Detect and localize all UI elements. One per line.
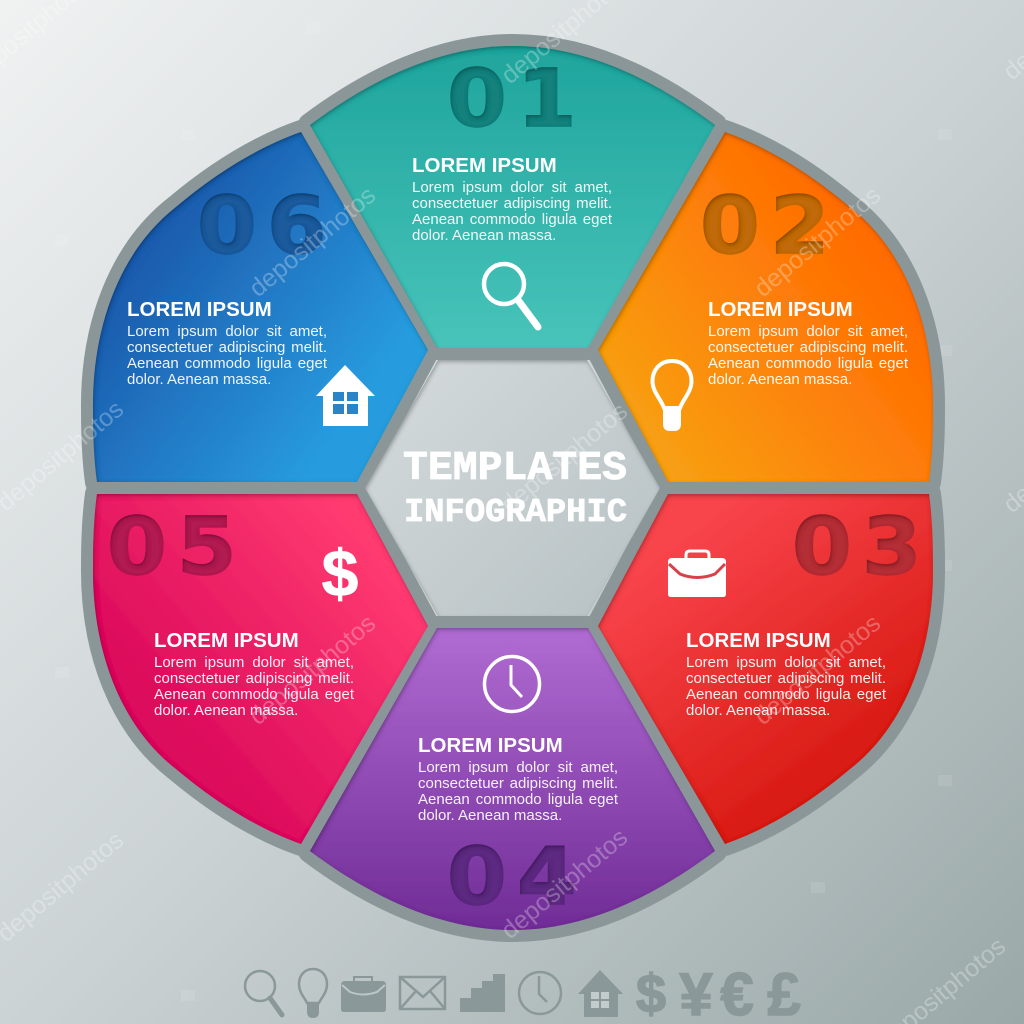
- number 03: 03: [792, 501, 932, 593]
- heading 02: LOREM IPSUM: [708, 298, 853, 321]
- panel 02: orange: [598, 132, 933, 482]
- panel 01: teal: [310, 46, 715, 348]
- number 06: 06: [197, 180, 337, 272]
- watermarks: depositphotos: [496, 823, 633, 945]
- heading 01: LOREM IPSUM: [412, 154, 557, 177]
- icon: dollar: $: [322, 536, 358, 610]
- watermarks: depositphotos: [496, 397, 633, 519]
- icon: light bulb: [652, 361, 692, 431]
- title: [403, 446, 627, 532]
- watermarks: depositphotos: [749, 609, 886, 731]
- icon row: [245, 961, 801, 1024]
- body text 03: Lorem ipsum dolor sit amet, consectetuer adipiscing melit. Aenean commodo ligula eget dolor. Aenean massa.: [686, 655, 886, 719]
- icon: house: [316, 365, 375, 426]
- body text 01: Lorem ipsum dolor sit amet, consectetuer adipiscing melit. Aenean commodo ligula eget dolor. Aenean massa.: [412, 180, 612, 244]
- row icon: house: [578, 970, 623, 1017]
- watermarks: depositphotos: [244, 181, 381, 303]
- ring: grey outline and gutters: [93, 46, 933, 930]
- watermarks: depositphotos: [244, 609, 381, 731]
- icon: clock: [484, 656, 540, 712]
- icon: magnifier: [484, 264, 538, 327]
- heading 05: LOREM IPSUM: [154, 629, 299, 652]
- panel 03: red: [598, 494, 933, 844]
- number 02: 02: [700, 180, 840, 272]
- number 01: 01: [447, 53, 587, 145]
- row icon: briefcase: [341, 977, 386, 1012]
- row icon: stairs: [460, 974, 505, 1012]
- body text 02: Lorem ipsum dolor sit amet, consectetuer adipiscing melit. Aenean commodo ligula eget dolor. Aenean massa.: [708, 324, 908, 388]
- row icon: magnifier: [245, 971, 282, 1015]
- heading 04: LOREM IPSUM: [418, 734, 563, 757]
- row icon: envelope: [400, 977, 445, 1009]
- body text 06: Lorem ipsum dolor sit amet, consectetuer adipiscing melit. Aenean commodo ligula eget dolor. Aenean massa.: [127, 324, 327, 388]
- panel 06: blue: [93, 132, 428, 482]
- body text 04: Lorem ipsum dolor sit amet, consectetuer adipiscing melit. Aenean commodo ligula eget dolor. Aenean massa.: [418, 760, 618, 824]
- row icon: clock: [519, 972, 561, 1014]
- row icon: bulb: [299, 969, 327, 1018]
- number 05: 05: [107, 501, 247, 593]
- body text 05: Lorem ipsum dolor sit amet, consectetuer adipiscing melit. Aenean commodo ligula eget dolor. Aenean massa.: [154, 655, 354, 719]
- panel 04: purple: [310, 628, 715, 930]
- row icon: dollar: $: [636, 964, 666, 1024]
- panel 05: pink: [93, 494, 428, 844]
- title: INFOGRAPHIC: [404, 494, 627, 532]
- number 04: 04: [447, 831, 587, 923]
- heading 03: LOREM IPSUM: [686, 629, 831, 652]
- heading 06: LOREM IPSUM: [127, 298, 272, 321]
- watermarks: depositphotos: [749, 181, 886, 303]
- center hexagon: [365, 360, 660, 616]
- title: TEMPLATES: [403, 446, 627, 492]
- icon: briefcase: [668, 551, 726, 597]
